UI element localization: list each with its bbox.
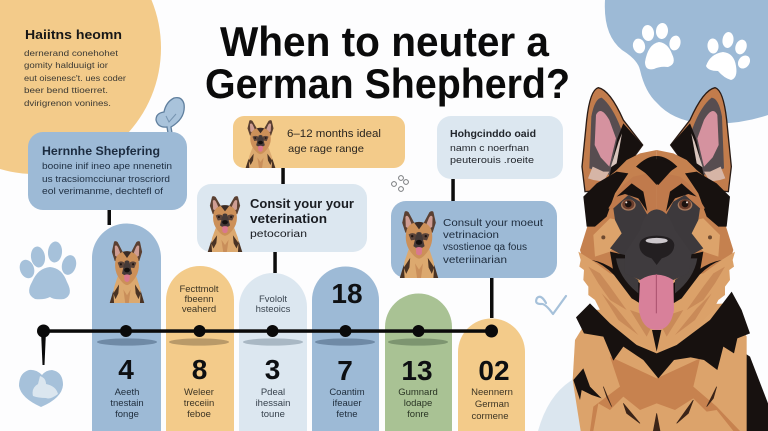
tongue	[639, 275, 674, 330]
intro text block: dernerand conehohet	[24, 48, 119, 58]
column 4 label: 7	[337, 355, 353, 386]
nose	[639, 236, 674, 265]
panel: Hohgcinddo: peuterouis .roeite	[450, 155, 534, 166]
column 2 label: 8	[192, 354, 207, 385]
intro text block: dvirigrenon vonines.	[24, 98, 111, 108]
icon: leaf	[156, 98, 184, 133]
intro text block: eut oisenesc't. ues coder	[24, 73, 126, 83]
column 2 top text: Fecttmolt	[179, 284, 219, 295]
panel: consult veterinarian right: Consult your moeut	[443, 217, 543, 229]
column 1	[92, 224, 161, 431]
column 2	[166, 266, 234, 431]
chest fur strokes	[603, 387, 717, 431]
chest tip	[652, 330, 661, 352]
column shadows	[97, 338, 448, 346]
panel: consult veterinarian center: veterination	[250, 211, 327, 226]
column 1 label	[110, 354, 144, 420]
column 3 top text	[256, 294, 291, 315]
panel: consult veterinarian right: vsostienoe qa fous	[443, 242, 527, 253]
title	[205, 18, 570, 107]
column 2 label	[184, 354, 214, 420]
column 2 top text	[179, 284, 219, 315]
panel: consult veterinarian center: petocorian	[250, 229, 307, 240]
column 6 label: cormene	[472, 411, 508, 422]
column 3 label: Pdeal	[261, 387, 285, 398]
illustration: German Shepherd	[573, 88, 768, 431]
column 6 label	[471, 355, 513, 422]
panel: Hernnhe Shepfering: booine inif ineo ape nnenetin	[42, 161, 172, 171]
column 2 top text: fbeenn	[184, 294, 214, 305]
head left	[578, 88, 657, 352]
column 2 label: treceiin	[184, 398, 214, 409]
icon: white paw left	[631, 22, 682, 69]
intro text block: beer bend ttioerret.	[24, 85, 108, 95]
panel: consult veterinarian center: Consit your your	[250, 196, 354, 211]
icon: small dog	[208, 196, 242, 252]
column 1 label: 4	[118, 354, 134, 385]
intro text block: Haiitns heomn	[25, 27, 122, 42]
column 2 label: Weleer	[184, 387, 214, 398]
column 6 label: 02	[478, 355, 510, 386]
panel: Hohgcinddo: Hohgcinddo oaid	[450, 129, 536, 140]
icon: small dog	[246, 120, 275, 168]
column 4 label: Coantim	[329, 387, 365, 398]
muzzle	[625, 209, 692, 280]
column 4	[312, 266, 379, 431]
column 3 label	[256, 354, 290, 420]
columns	[92, 224, 525, 431]
column 3 label: ihessain	[256, 398, 290, 409]
title: When to neuter a	[220, 18, 550, 65]
chest shading	[590, 357, 740, 431]
connectors	[108, 168, 494, 318]
panel: 6-12 months	[233, 116, 405, 168]
panel: Hernnhe Shepfering: Hernnhe Shepfering	[42, 144, 160, 158]
column 3 top text: Fvololt	[259, 294, 287, 305]
column 1 label: Aeeth	[115, 387, 139, 398]
icon: organ heart	[19, 370, 63, 407]
small dog in column 1	[110, 241, 144, 303]
column 3 label: toune	[261, 409, 285, 420]
panel: Hohgcinddo	[437, 116, 563, 179]
pale arc behind dog	[538, 380, 600, 431]
icon: white paw right	[706, 31, 753, 80]
panel: Hernnhe Shepfering	[28, 132, 187, 210]
column 4 label	[329, 355, 365, 420]
dog back	[740, 350, 768, 431]
dog chest	[573, 303, 747, 431]
panel: Hernnhe Shepfering: eol verimanme, dechtefl of	[42, 186, 164, 196]
column 4 label: ifeauer	[332, 398, 362, 409]
column 5 label: fonre	[407, 409, 429, 420]
panel: consult veterinarian center	[197, 184, 367, 252]
blue corner shape	[605, 0, 768, 124]
column 4 label: fetne	[336, 409, 358, 420]
orange corner circle	[0, 0, 161, 174]
icon: squiggle	[536, 296, 566, 314]
panel: consult veterinarian right	[391, 201, 557, 278]
decorative circles	[392, 176, 408, 191]
intro text block	[24, 27, 126, 108]
column 6 label: German	[475, 399, 509, 410]
column 5 label	[398, 355, 438, 420]
panel: 6-12 months: 6–12 months ideal	[287, 128, 381, 140]
column 5	[385, 294, 452, 431]
panel: consult veterinarian right: veteriinarian	[443, 255, 507, 266]
panel: Hohgcinddo: namn c noerfnan	[450, 143, 529, 154]
column 3 top text: hsteoics	[256, 304, 291, 315]
column 5 label: Gumnard	[398, 387, 438, 398]
forehead centre	[638, 159, 675, 185]
panel: consult veterinarian right: vetrinacion	[443, 230, 499, 241]
black collar	[576, 292, 750, 378]
column 1 label: tnestain	[110, 398, 144, 409]
icon: pale paw	[17, 241, 78, 299]
nose highlight	[646, 238, 668, 243]
column 3	[239, 273, 307, 431]
panel: 6-12 months: age rage range	[288, 143, 364, 155]
column 5 label: lodape	[404, 398, 432, 409]
head right	[657, 88, 735, 352]
timeline	[37, 324, 498, 365]
panel: Hernnhe Shepfering: us tracsiomcciunar troscriord	[42, 174, 170, 184]
title: German Shepherd?	[205, 60, 570, 107]
column 2 top text: veaherd	[182, 304, 216, 315]
column 6 label: Neennern	[471, 387, 513, 398]
column 2 label: feboe	[187, 409, 211, 420]
number 18: 18	[331, 278, 363, 309]
column 6	[458, 318, 525, 431]
black lower left	[573, 368, 602, 400]
intro text block: gomity halduuigt ior	[24, 60, 108, 70]
icon: small dog	[400, 211, 438, 278]
tongue crease	[655, 274, 658, 313]
column 5 label: 13	[401, 355, 433, 386]
column 1 label: fonge	[115, 409, 139, 420]
column 3 label: 3	[265, 354, 280, 385]
